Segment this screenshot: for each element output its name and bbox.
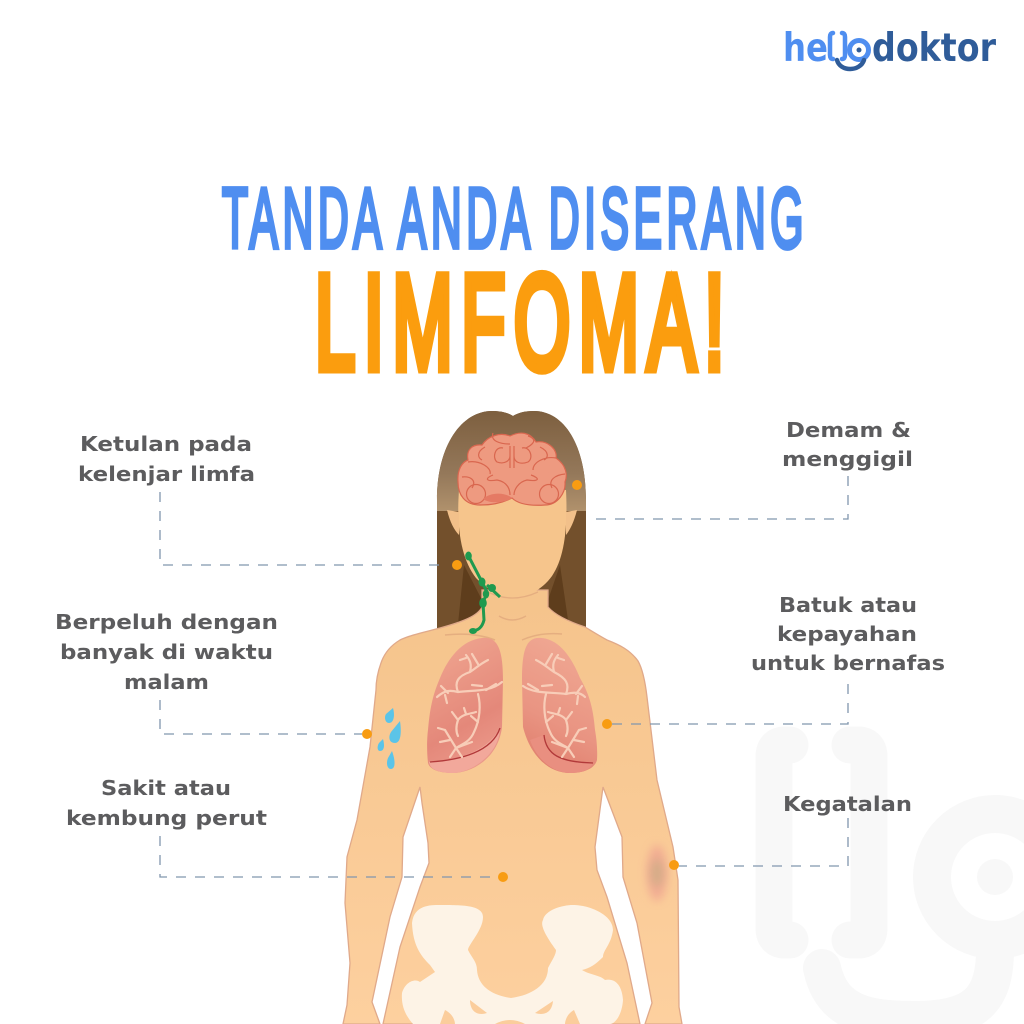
callout: sakit atau kembung perut: kembung perut	[66, 806, 267, 830]
callout: kegatalan	[669, 792, 912, 870]
chin shadow	[488, 592, 538, 598]
icon: sweat drops	[378, 708, 401, 769]
callout: berpeluh di waktu malam: banyak di waktu	[60, 640, 273, 664]
callout: sakit atau kembung perut: Sakit atau	[101, 776, 231, 800]
callout: ketulan pada kelenjar limfa: Ketulan pada	[80, 432, 252, 456]
callout: batuk atau kepayahan: untuk bernafas	[751, 651, 945, 675]
callout: ketulan pada kelenjar limfa: kelenjar limfa	[78, 462, 255, 486]
callout: demam dan menggigil: menggigil	[782, 447, 913, 471]
brain	[458, 433, 566, 505]
callout: batuk atau kepayahan: Batuk atau	[779, 593, 917, 617]
background watermark logo	[774, 745, 1024, 1020]
callout: batuk atau kepayahan	[602, 593, 945, 729]
green lymph vessel	[465, 552, 500, 634]
logo: hellodoktor: doktor	[872, 26, 997, 71]
callout: berpeluh di waktu malam: malam	[124, 670, 209, 694]
pelvis	[402, 905, 623, 1024]
logo: hellodoktor: he	[783, 26, 828, 71]
callout: berpeluh di waktu malam: Berpeluh dengan	[55, 610, 278, 634]
face	[458, 490, 566, 598]
pelvis openings	[440, 1000, 580, 1024]
callout: kegatalan: Kegatalan	[783, 792, 912, 816]
neck crease	[445, 616, 562, 640]
callout: sakit atau kembung perut	[66, 776, 508, 882]
ears	[447, 510, 577, 535]
logo: hellodoktor	[783, 26, 997, 71]
callout: demam dan menggigil: Demam &	[786, 418, 911, 442]
illustration: human body	[343, 411, 682, 1024]
rash	[647, 845, 667, 901]
callout: berpeluh di waktu malam	[55, 610, 372, 739]
left lung	[427, 638, 503, 773]
callout: demam dan menggigil	[572, 418, 913, 519]
body and arms	[343, 590, 682, 1024]
hair	[437, 411, 586, 630]
right lung	[522, 638, 597, 773]
callout: batuk atau kepayahan: kepayahan	[777, 622, 917, 646]
callout: ketulan pada kelenjar limfa	[78, 432, 462, 570]
